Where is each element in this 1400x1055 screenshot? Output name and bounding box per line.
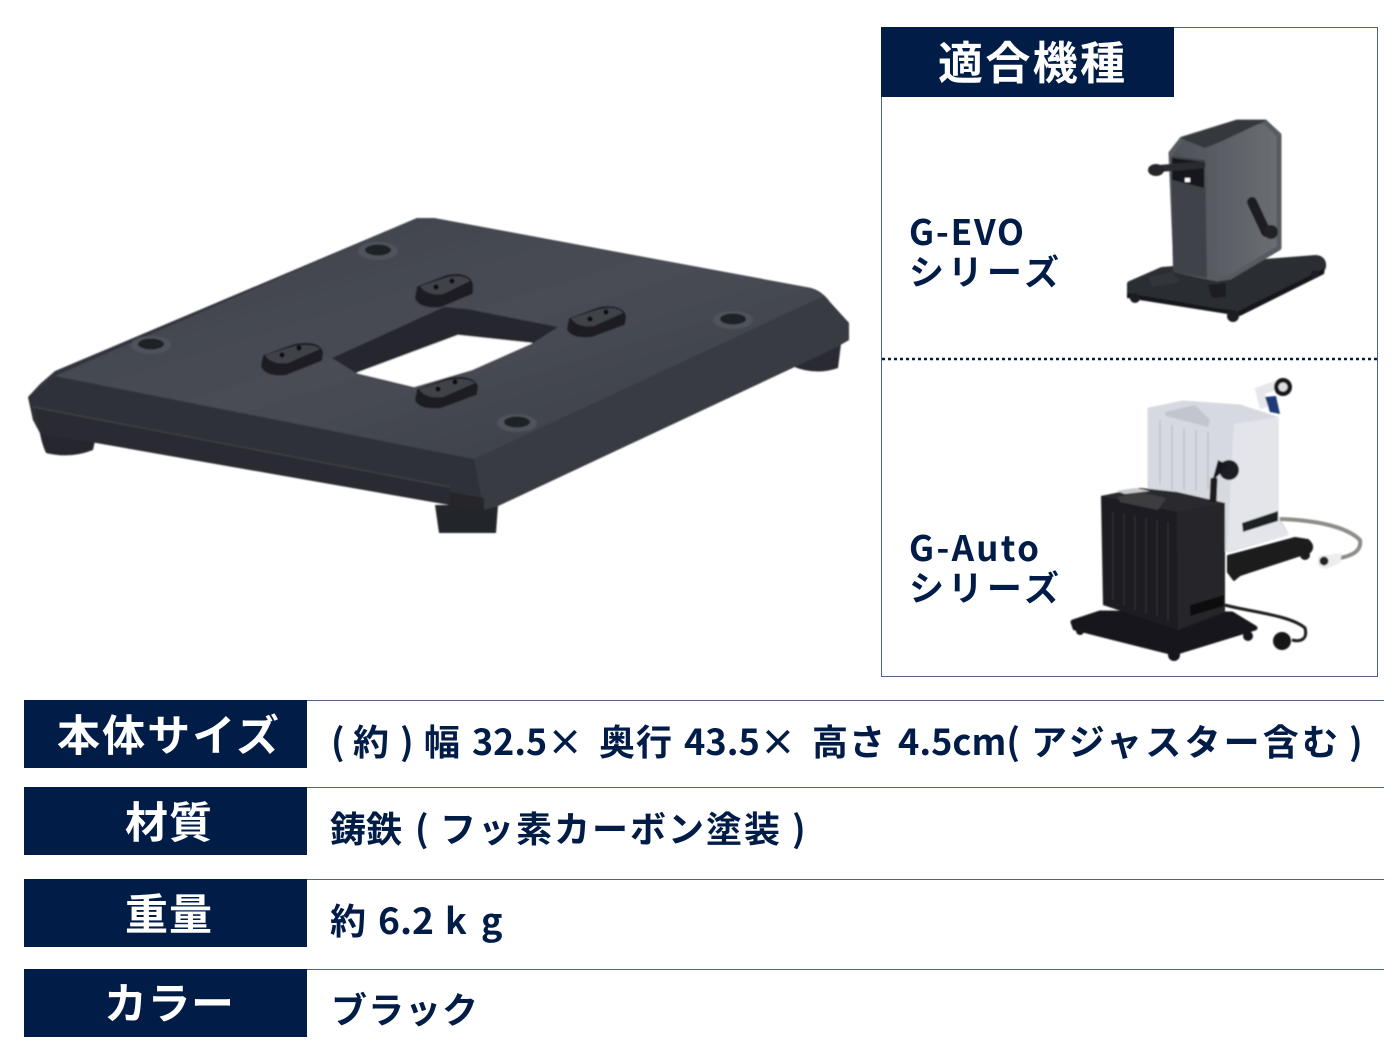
row: weight: 6.2 xyxy=(378,893,434,945)
row: body size: 32.5× xyxy=(472,714,583,766)
photo: G-Auto units xyxy=(1073,378,1360,661)
row: body size: 高さ xyxy=(812,714,885,766)
row: body size: アジャスター含む xyxy=(1031,714,1338,766)
heading: compatible models: 適合機種 xyxy=(938,27,1125,92)
row: body size: ) xyxy=(1349,714,1363,766)
front foot xyxy=(435,505,498,533)
centre recess xyxy=(332,307,558,387)
white unit body xyxy=(1149,402,1287,551)
row: body size: 4.5cm( xyxy=(898,714,1020,766)
opening xyxy=(356,335,533,387)
plate outline xyxy=(28,218,849,510)
black spray nozzle xyxy=(1212,460,1239,502)
row: material: ) xyxy=(792,801,806,853)
label: G-Auto series: G-Auto xyxy=(909,521,1039,572)
body xyxy=(1171,122,1279,279)
boss 1 xyxy=(416,275,472,306)
row: body size: ) xyxy=(400,714,414,766)
heading: compatible models xyxy=(881,27,1174,97)
mounting hole: left xyxy=(131,336,171,354)
row: material xyxy=(24,787,1384,855)
mounting hole: right xyxy=(713,311,753,329)
row: body size xyxy=(24,700,1384,768)
row: material: 材質 xyxy=(125,789,212,851)
row: weight xyxy=(24,879,1384,947)
front-right bevel xyxy=(474,296,849,510)
front-left bevel xyxy=(28,376,484,510)
row: weight: g xyxy=(481,893,502,945)
black hose xyxy=(1225,605,1306,641)
row: colour: ブラック xyxy=(331,982,478,1034)
row: colour xyxy=(24,969,1384,1037)
row: body size: 幅 xyxy=(424,714,460,766)
boss 2 xyxy=(568,307,625,336)
row: weight: 約 xyxy=(330,893,366,945)
row: material: フッ素カーボン塗装 xyxy=(440,801,780,853)
row: body size: ( xyxy=(331,714,345,766)
label: G-Auto series: シリーズ xyxy=(909,561,1059,612)
dotted divider xyxy=(882,358,1378,360)
right foot xyxy=(792,336,842,372)
row: weight: k xyxy=(445,893,467,945)
row: body size: 43.5× xyxy=(684,714,796,766)
panel: compatible models xyxy=(881,27,1378,676)
boss 3 xyxy=(262,344,322,374)
base plate xyxy=(1130,258,1323,308)
row: body size: 約 xyxy=(353,714,389,766)
mounting hole: top xyxy=(358,242,398,260)
row: body size: 本体サイズ xyxy=(57,702,279,764)
mounting hole: front xyxy=(497,414,537,432)
white connector xyxy=(1318,553,1342,569)
black unit base xyxy=(1073,613,1255,652)
boss 4 xyxy=(416,378,477,407)
spray gun on white unit xyxy=(1260,378,1292,414)
row: colour: カラー xyxy=(104,970,234,1032)
product photo: cast iron base plate xyxy=(28,218,849,533)
white unit base xyxy=(1228,538,1312,580)
top face xyxy=(55,218,824,459)
photo: G-EVO unit on base xyxy=(1127,120,1325,322)
black unit body xyxy=(1101,488,1225,630)
label: G-EVO series: シリーズ xyxy=(909,245,1059,296)
grey hose xyxy=(1280,519,1360,558)
row: material: ( xyxy=(415,801,429,853)
row: body size: 奥行 xyxy=(599,714,672,766)
front corner facet xyxy=(450,492,484,510)
label: G-EVO series: G-EVO xyxy=(909,205,1024,256)
left foot xyxy=(38,420,96,455)
row: material: 鋳鉄 xyxy=(330,801,402,853)
row: weight: 重量 xyxy=(125,881,212,943)
